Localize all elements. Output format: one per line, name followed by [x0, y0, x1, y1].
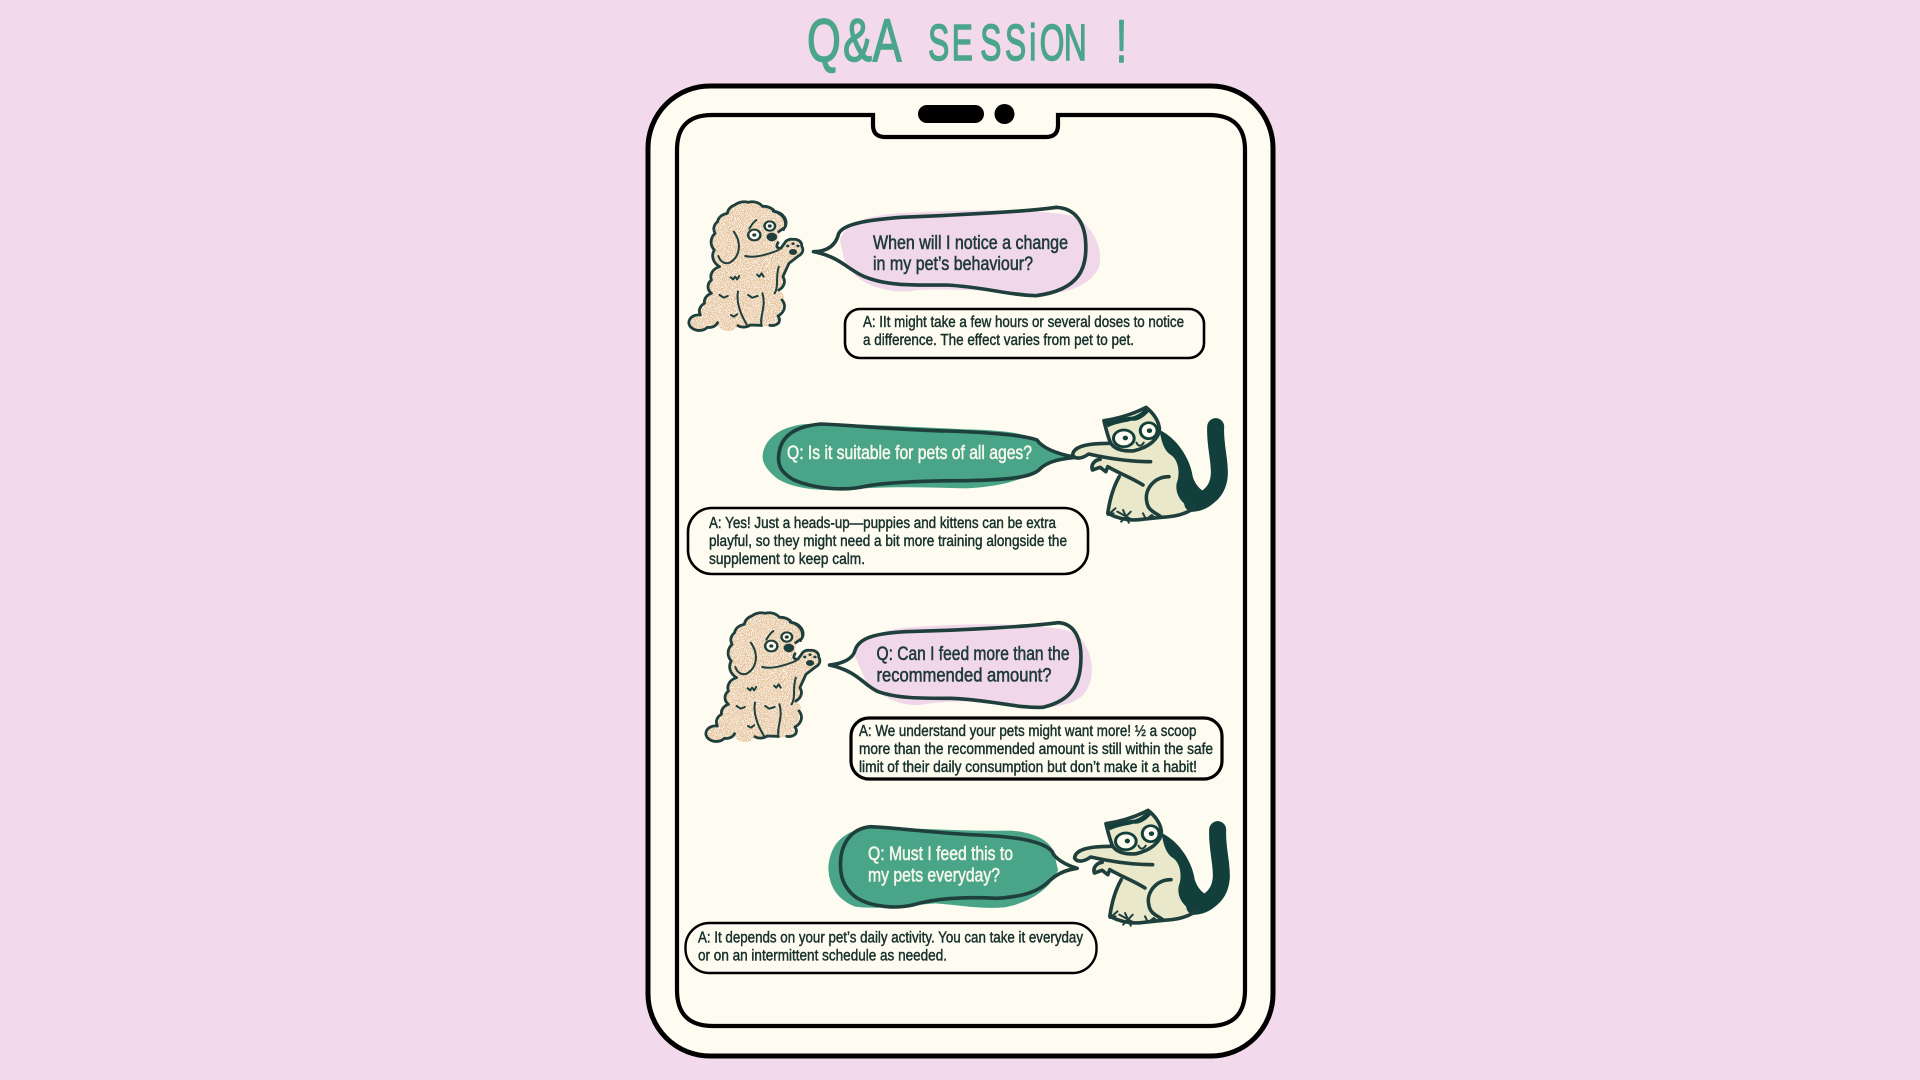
- answer box 2: supplement to keep calm.: [709, 551, 865, 568]
- title: Q&A: [807, 8, 902, 75]
- answer box 2: [688, 508, 1088, 574]
- question bubble 3: recommended amount?: [876, 666, 1052, 686]
- answer box 3: limit of their daily consumption but don’t make it a habit!: [859, 759, 1197, 776]
- dog eyes: [748, 230, 760, 240]
- question bubble 2: [763, 424, 1075, 490]
- answer box 4: or on an intermittent schedule as needed.: [698, 948, 947, 964]
- answer box 1: [845, 309, 1204, 358]
- answer box 1: a difference. The effect varies from pet to pet.: [863, 332, 1134, 349]
- answer box 3: A: We understand your pets might want more! ½ a scoop: [859, 723, 1196, 740]
- answer box 1: A: IIt might take a few hours or several doses to notice: [863, 314, 1184, 331]
- question bubble 4: Q: Must I feed this to: [868, 844, 1013, 865]
- answer box 3: [851, 718, 1222, 779]
- answer box 2: playful, so they might need a bit more training alongside the: [709, 533, 1067, 550]
- question bubble 3: [830, 623, 1092, 707]
- question bubble 4: my pets everyday?: [868, 866, 1000, 886]
- question bubble 1: in my pet’s behaviour?: [873, 254, 1033, 275]
- dog illustration 2: [706, 613, 820, 742]
- question bubble 4: [828, 827, 1077, 908]
- answer box 4: [686, 923, 1096, 973]
- question bubble 1: When will I notice a change: [873, 233, 1068, 254]
- phone frame: [648, 86, 1273, 1056]
- answer box 4: A: It depends on your pet’s daily activity. You can take it everyday: [698, 930, 1083, 946]
- speaker pill: [918, 105, 984, 123]
- camera: [994, 104, 1014, 124]
- cat eyes: [1113, 430, 1134, 447]
- question bubble 2: Q: Is it suitable for pets of all ages?: [787, 443, 1032, 464]
- dog illustration 1: [689, 202, 803, 331]
- title: !: [1116, 8, 1127, 75]
- cat illustration 2: [1075, 810, 1221, 926]
- answer box 3: more than the recommended amount is still within the safe: [859, 741, 1213, 758]
- cat illustration 1: [1073, 407, 1219, 523]
- answer box 2: A: Yes! Just a heads-up—puppies and kittens can be extra: [709, 515, 1056, 532]
- title: SESSiON: [928, 14, 1087, 71]
- title: [807, 8, 1127, 75]
- question bubble 3: Q: Can I feed more than the: [876, 644, 1070, 665]
- question bubble 1: [813, 207, 1100, 296]
- phone screen with notch: [677, 115, 1245, 1026]
